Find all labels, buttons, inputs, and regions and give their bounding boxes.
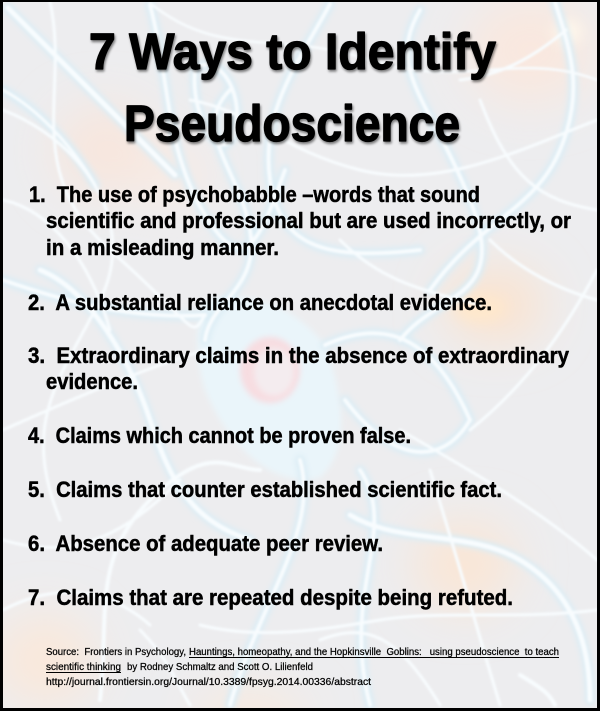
source citation: Source: Frontiers in Psychology, — [46, 647, 186, 658]
source citation: http://journal.frontiersin.org/Journal/10.3389/fpsyg.2014.00336/abstract — [46, 677, 371, 688]
item 3: 3. Extraordinary claims in the absence of extraordinary — [28, 343, 570, 368]
glow: right — [456, 298, 490, 320]
item 6: 6. Absence of adequate peer review. — [28, 531, 383, 556]
source citation: Hauntings, homeopathy, and the Hopkinsville Goblins: using pseudoscience to teach — [189, 647, 559, 658]
item 1 — [29, 182, 571, 260]
item 1: in a misleading manner. — [46, 235, 279, 260]
source citation: scientific thinking — [46, 662, 121, 673]
item 2: 2. A substantial reliance on anecdotal evidence. — [28, 290, 492, 315]
item 7: 7. Claims that are repeated despite being refuted. — [28, 585, 513, 610]
title: 7 Ways to Identify — [89, 23, 497, 80]
title — [89, 23, 497, 152]
item 1: scientific and professional but are used incorrectly, or — [46, 208, 571, 233]
source citation — [46, 647, 559, 688]
item 3 — [28, 343, 570, 394]
title: Pseudoscience — [124, 95, 460, 152]
glow: top right — [570, 24, 577, 38]
source citation: by Rodney Schmaltz and Scott O. Lilienfeld — [127, 662, 313, 673]
item 4: 4. Claims which cannot be proven false. — [28, 423, 411, 448]
item 3: evidence. — [46, 369, 138, 394]
item 5: 5. Claims that counter established scientific fact. — [28, 477, 502, 502]
neuron cell body — [198, 296, 341, 480]
list: seven indicators — [28, 182, 571, 610]
neuron nucleus — [240, 337, 300, 403]
item 1: 1. The use of psychobabble –words that sound — [29, 182, 480, 207]
